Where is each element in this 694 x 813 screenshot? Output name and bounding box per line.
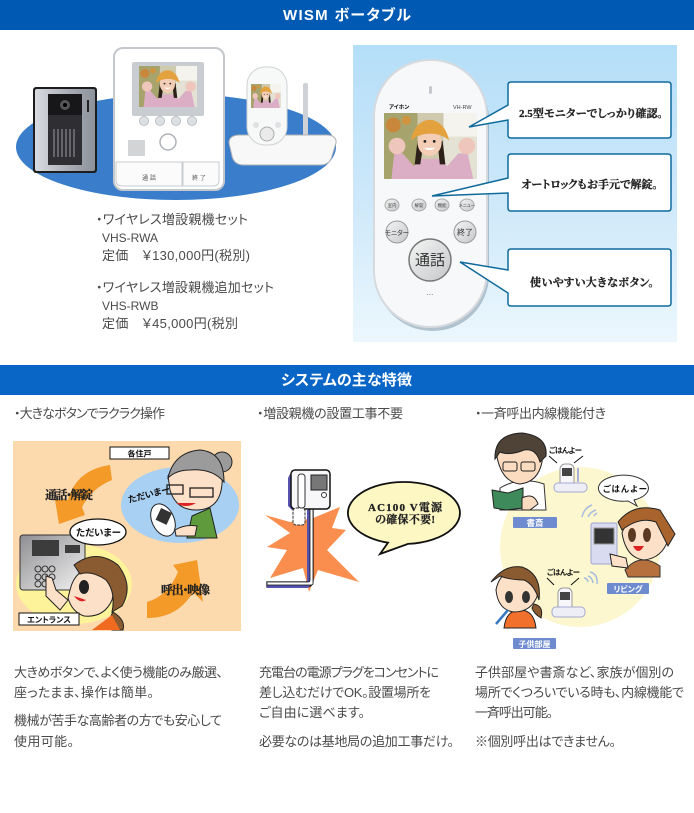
child — [491, 567, 542, 628]
arrow: call and video — [147, 560, 203, 618]
mother — [610, 508, 675, 577]
speech bubble: AC100V: AC100 V電源 — [368, 500, 443, 514]
label: each home: 各住戸 — [128, 448, 152, 458]
speech bubble: ただいまー — [76, 528, 121, 539]
header: system features: システムの主な特徴 — [281, 371, 412, 389]
label: entrance — [19, 613, 79, 625]
callout: monitor — [469, 82, 671, 138]
large handset: 終了 — [457, 227, 473, 237]
label: kids room — [513, 638, 556, 649]
label: living — [607, 583, 649, 594]
product text: set RWB: 定価 ￥45,000円(税別 — [102, 316, 238, 331]
text column 3 — [475, 665, 685, 749]
illustration: no wiring — [265, 470, 460, 592]
wifi arcs — [582, 505, 597, 584]
label: study: 書斎 — [526, 518, 544, 528]
large handset: モニター — [385, 228, 409, 237]
text column 1 — [14, 665, 223, 749]
main monitor — [114, 48, 224, 190]
grandmother — [127, 450, 232, 540]
text column 1: 使用可能。 — [14, 734, 74, 749]
handset upper — [549, 445, 587, 492]
text column 3: 子供部屋や書斎など、家族が個別の — [475, 665, 674, 680]
orange burst — [265, 507, 359, 592]
product text: set RWB: VHS-RWB — [102, 299, 158, 313]
main monitor: 通 話 — [142, 174, 156, 182]
feature heading 3: ・一斉呼出内線機能付き — [475, 406, 606, 421]
text column 2: 差し込むだけでOK。設置場所を — [259, 685, 431, 700]
large handset: 機能 — [438, 202, 447, 209]
text column 1: 座ったまま、操作は簡単。 — [14, 685, 154, 700]
handset lower: ごはんよー — [547, 567, 580, 577]
product set illustration — [16, 48, 336, 200]
text column 2: 必要なのは基地局の追加工事だけ。 — [259, 734, 454, 749]
large handset: ... — [427, 288, 433, 297]
text column 3: 一斉呼出可能。 — [475, 705, 553, 720]
label: call video: 呼出・映像 — [161, 582, 210, 597]
text column 2: 充電台の電源プラグをコンセントに — [259, 665, 439, 680]
speech bubble: AC100V — [348, 482, 460, 554]
bubble: mother — [598, 475, 648, 506]
text column 3: 場所でくつろいでいる時も、内線機能で — [475, 685, 685, 700]
callout: monitor: 2.5型モニターでしっかり確認。 — [519, 106, 663, 120]
product text: set RWA: ・ワイヤレス増設親機セット — [96, 212, 248, 227]
father in study — [492, 433, 546, 510]
product text: set RWA: VHS-RWA — [102, 231, 158, 245]
callout: big button: 使いやすい大きなボタン。 — [530, 275, 654, 289]
product text: set RWB — [96, 280, 274, 331]
label: kids room: 子供部屋 — [518, 639, 550, 649]
product text: set RWA — [96, 212, 250, 263]
feature heading 2: ・増設親機の設置工事不要 — [257, 406, 403, 421]
main monitor: 終 了 — [192, 174, 206, 182]
speech bubble: AC100V: の確保不要! — [375, 512, 435, 526]
text column 1: 機械が苦手な高齢者の方でも安心して — [14, 713, 222, 728]
wall unit with pole — [267, 470, 330, 588]
label: entrance: エントランス — [27, 616, 71, 624]
header: system features — [0, 365, 694, 395]
handset on cradle — [229, 67, 336, 165]
main unit — [591, 523, 617, 564]
large handset — [374, 60, 489, 331]
large handset: アイホン — [389, 104, 410, 111]
girl at entrance — [46, 556, 127, 630]
label: living: リビング — [613, 584, 643, 594]
text column 2: ご自由に選べます。 — [259, 705, 365, 720]
speech bubble — [70, 519, 126, 545]
illustration: group call — [491, 433, 675, 649]
product text: set RWA: 定価 ￥130,000円(税別) — [102, 248, 250, 263]
large handset: VH-RW — [453, 105, 472, 111]
entrance panel — [20, 535, 85, 590]
text column 3: ※個別呼出はできません。 — [475, 734, 616, 749]
large handset: 室内 — [388, 202, 397, 209]
callout: big button — [460, 249, 671, 306]
grandmother: ただいまー — [127, 484, 171, 505]
handset upper: ごはんよー — [549, 445, 582, 455]
label: talk unlock: 通話・解錠 — [45, 487, 93, 502]
callout: auto lock: オートロックもお手元で解錠。 — [521, 177, 658, 191]
label: each home — [110, 447, 169, 459]
product text: set RWB: ・ワイヤレス増設親機追加セット — [96, 280, 274, 295]
door station — [33, 87, 97, 173]
header: WISM portable: WISM ボータブル — [283, 6, 411, 24]
large handset: 通話 — [415, 252, 445, 269]
callout: auto lock — [432, 154, 671, 211]
feature heading 1: ・大きなボタンでラクラク操作 — [14, 406, 165, 421]
label: study — [513, 517, 557, 528]
large handset: 解錠 — [414, 202, 424, 209]
arrow: talk and unlock — [55, 465, 112, 524]
panel: handset features — [353, 45, 677, 342]
text column 1: 大きめボタンで、よく使う機能のみ厳選、 — [14, 665, 223, 680]
header: WISM portable — [0, 0, 694, 30]
text column 2 — [259, 665, 454, 749]
large handset: メニュー — [459, 203, 476, 208]
illustration: operation flow — [13, 441, 241, 631]
handset lower — [547, 567, 585, 617]
blue ellipse backdrop — [16, 94, 336, 200]
bubble: mother: ごはんよー — [603, 484, 647, 494]
